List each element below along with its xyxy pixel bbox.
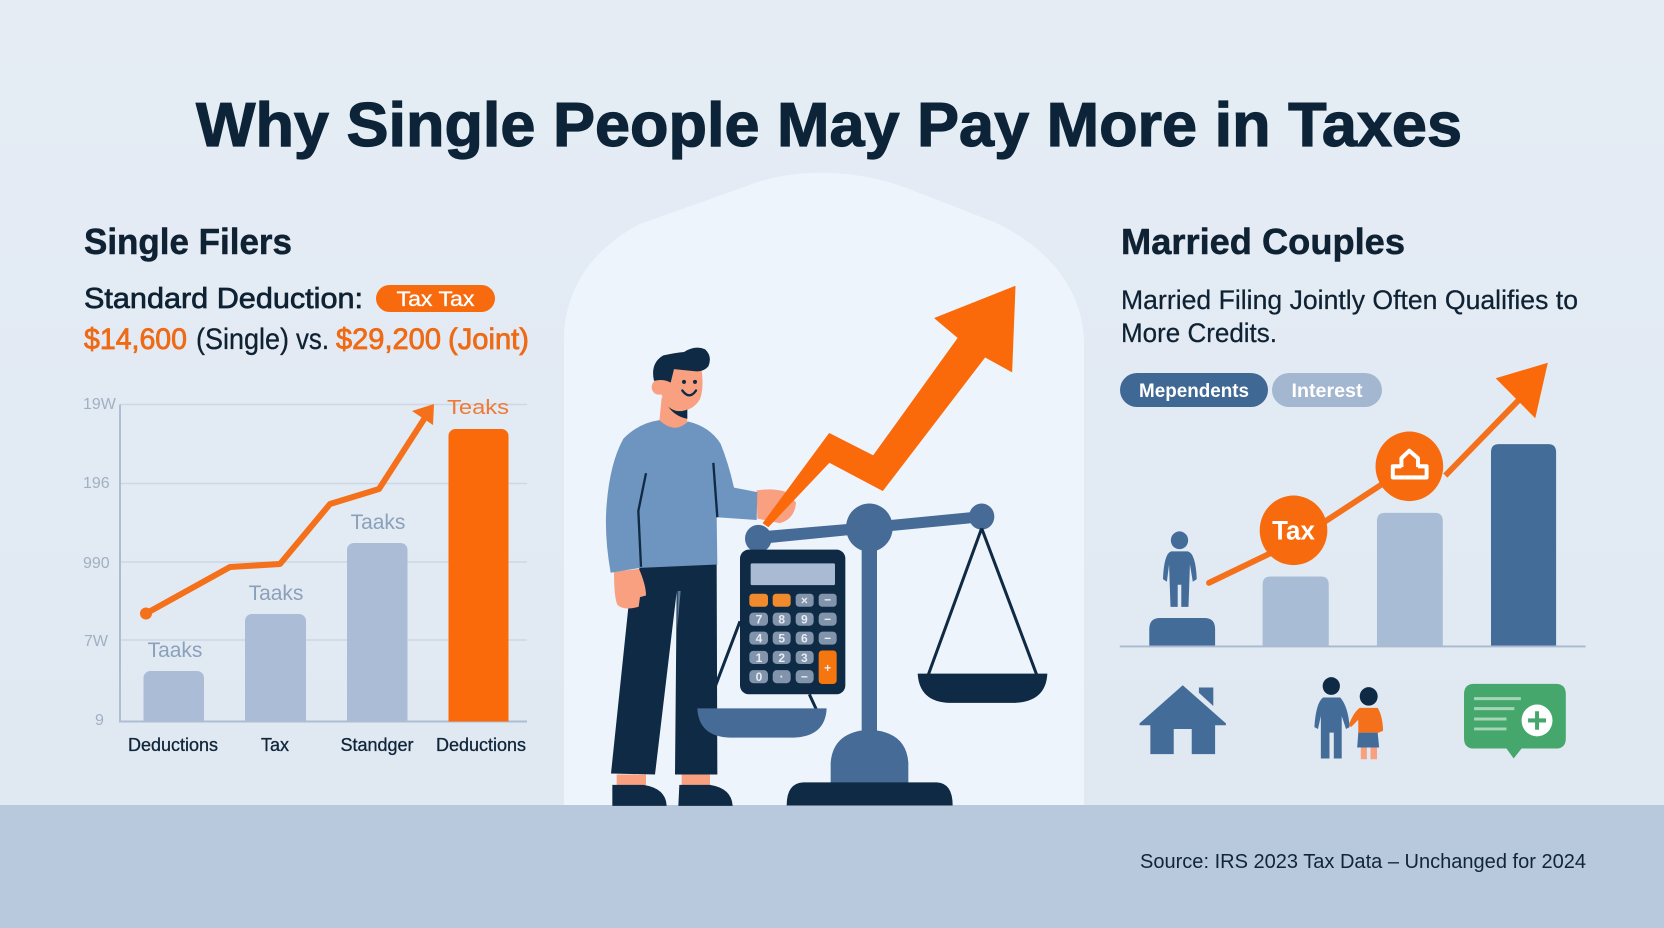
badge: tax: Tax: [1272, 515, 1315, 546]
heading: single filers: Single Filers: [84, 221, 292, 262]
pill: mependents: Mependents: [1139, 381, 1249, 402]
icon: calculator: −: [824, 593, 831, 607]
center illustration: [606, 287, 1047, 806]
bar chart: deductions: Deductions: [436, 735, 526, 755]
title: Why Single People May Pay More in Taxes: [196, 91, 1462, 160]
bar chart: deductions: Taaks: [148, 639, 202, 662]
pill: tax tax: [376, 285, 495, 312]
icon: calculator: [740, 550, 845, 694]
icon: calculator: 9: [801, 613, 808, 627]
pill: interest: Interest: [1292, 381, 1363, 402]
standard deduction label: Standard Deduction:: [84, 283, 363, 315]
icon: balance scale: [697, 503, 1047, 806]
rising bar chart: [1120, 444, 1586, 646]
source note: Source: IRS 2023 Tax Data – Unchanged for 2024: [1140, 851, 1586, 873]
bar chart: deductions: 196: [83, 475, 110, 492]
panel: single filers: [83, 221, 529, 755]
person: [606, 348, 796, 806]
deduction comparison: (Single): [196, 323, 289, 356]
icon: calculator: 6: [801, 631, 808, 646]
bar chart: deductions: Standger: [340, 735, 414, 755]
center arch backdrop: [564, 173, 1084, 805]
icon: calculator: ·: [780, 669, 784, 684]
icon: calculator: 7: [756, 613, 763, 627]
bar chart: deductions: Taaks: [249, 582, 303, 605]
deduction comparison: [84, 323, 529, 356]
trend arrow: [140, 404, 434, 620]
icon: calculator: 2: [778, 651, 785, 665]
icon: calculator: 4: [756, 631, 763, 646]
deduction comparison: $29,200: [336, 323, 441, 356]
bar chart: deductions: Taaks: [351, 511, 405, 534]
description: Married Filing Jointly Often Qualifies to: [1121, 285, 1578, 315]
icon: calculator: +: [824, 661, 831, 675]
icon: calculator: 8: [778, 613, 785, 627]
bar chart: deductions: 9: [95, 712, 104, 729]
icon: house: [1140, 685, 1226, 754]
icon: calculator: −: [824, 612, 831, 626]
deduction comparison: vs.: [296, 323, 329, 356]
bar chart: deductions: 7W: [84, 633, 109, 650]
panel: married couples: [1120, 221, 1586, 759]
icon: calculator: 1: [756, 651, 763, 665]
deduction comparison: $14,600: [84, 323, 187, 356]
trend arrow with badges: [1209, 363, 1548, 583]
icon: calculator: −: [824, 631, 831, 645]
heading: married couples: Married Couples: [1121, 221, 1405, 262]
badge: upload icon: [1376, 432, 1443, 501]
icon: calculator: ×: [801, 594, 808, 608]
description: More Credits.: [1121, 318, 1277, 348]
icon: calculator: 3: [801, 651, 808, 665]
pill: mependents: [1120, 373, 1268, 407]
bar chart: deductions: Tax: [261, 735, 289, 755]
icon: parent and child: [1314, 677, 1383, 759]
bar chart: deductions: [83, 396, 527, 755]
pill: interest: [1272, 373, 1382, 407]
deduction comparison: (Joint): [448, 323, 529, 356]
bar chart: deductions: Teaks: [447, 397, 509, 419]
bar chart: deductions: Deductions: [128, 735, 218, 755]
description: [1121, 285, 1578, 348]
pill: tax tax: Tax Tax: [396, 288, 475, 311]
bar chart: deductions: 990: [83, 555, 110, 572]
icon: calculator: 0: [756, 670, 763, 684]
footer band: [0, 805, 1664, 928]
bar chart: deductions: 19W: [83, 396, 117, 413]
icon: green credit note: [1464, 684, 1566, 759]
icon: calculator: 5: [778, 631, 785, 646]
badge: tax: [1260, 496, 1327, 565]
big orange arrow: [763, 287, 1015, 527]
icon: person on first bar: [1163, 531, 1197, 607]
icon: calculator: −: [801, 670, 808, 684]
